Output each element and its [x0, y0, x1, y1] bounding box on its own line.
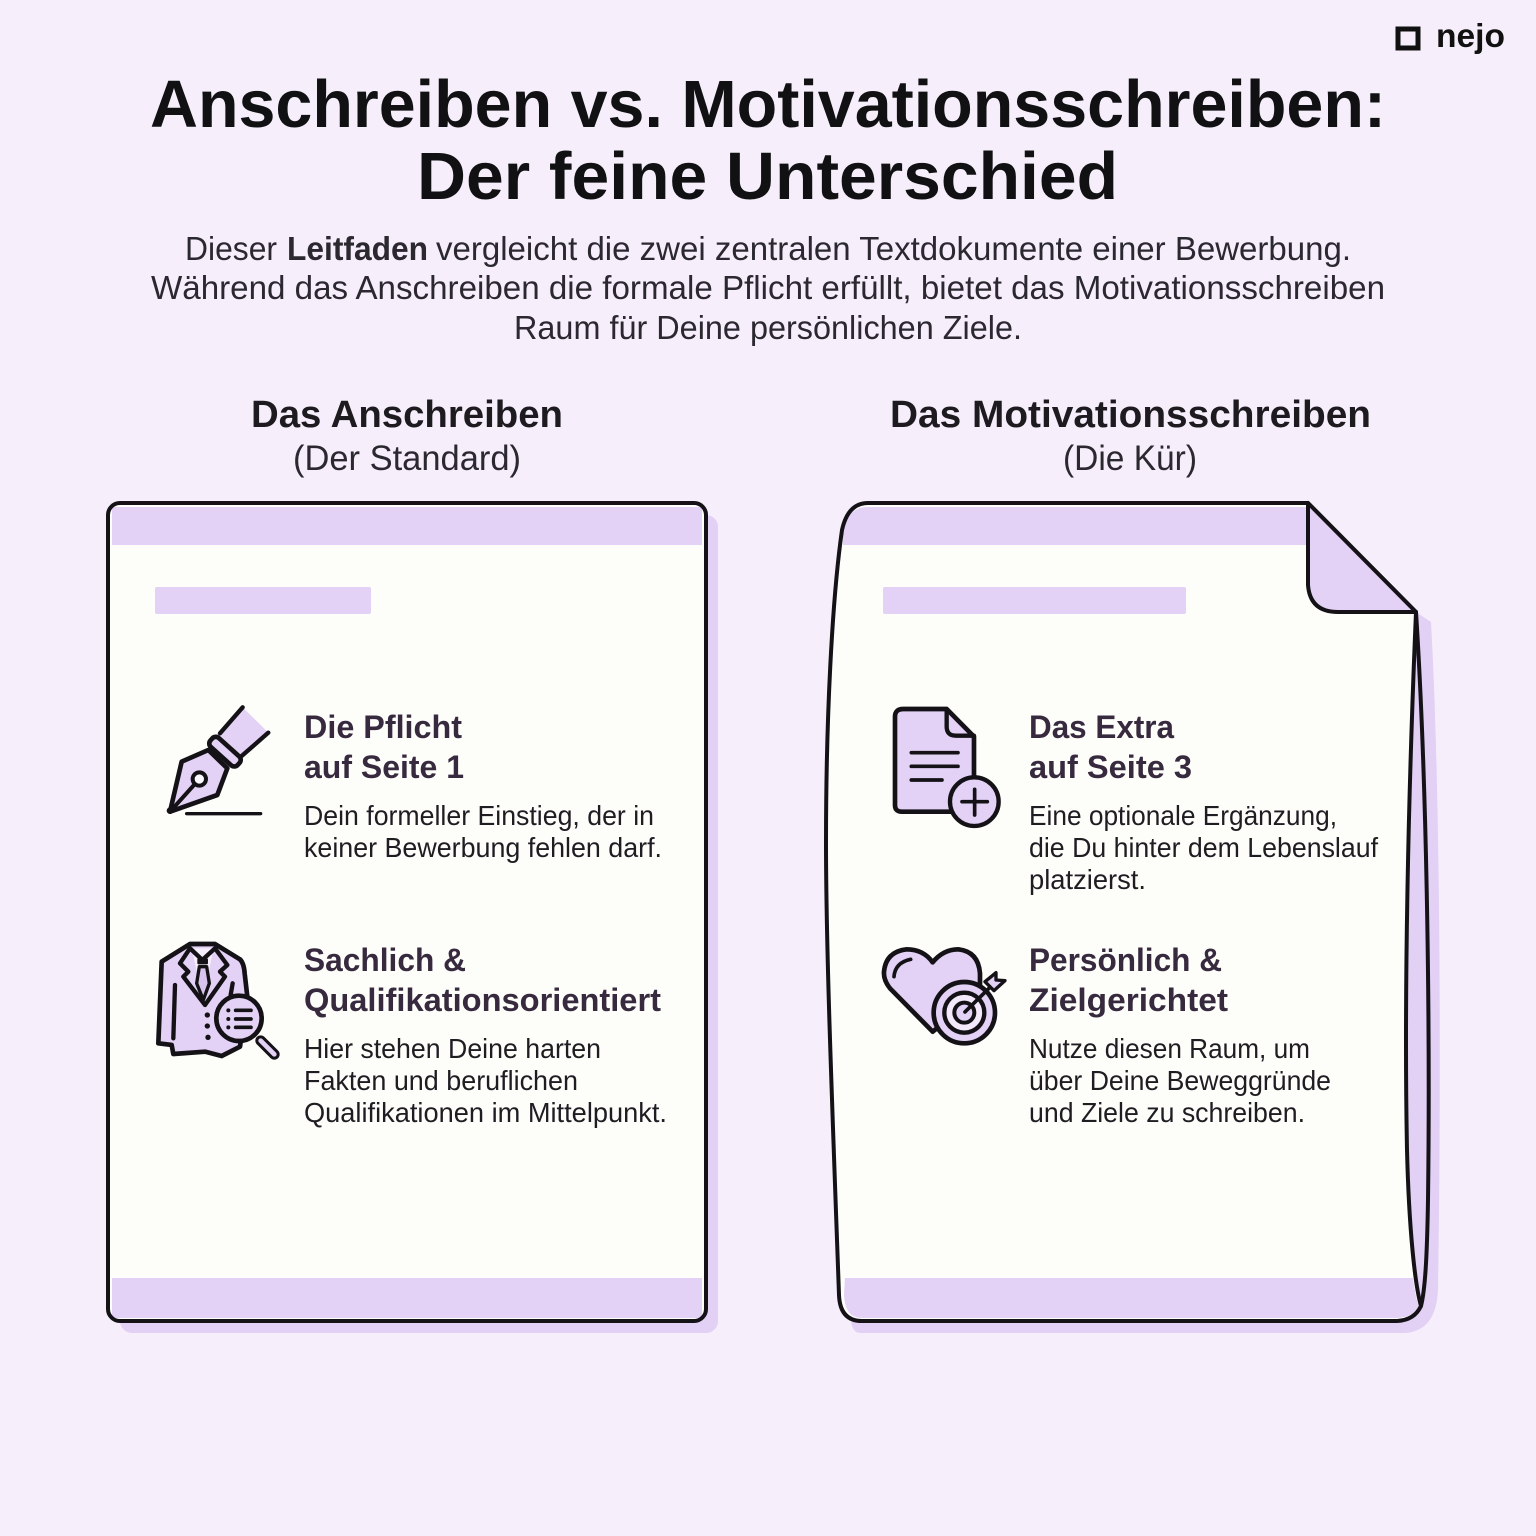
column heading: Das Anschreiben: (Der Standard) [293, 439, 521, 478]
icon: blazer with magnifier [158, 944, 274, 1056]
text: Persönlich und Zielgerichtet: Nutze diesen Raum, um [1029, 1033, 1310, 1064]
panel: Das Anschreiben [108, 503, 718, 1333]
text: Das Extra: Eine optionale Ergänzung, [1029, 800, 1337, 831]
logo: nejo: nejo [1436, 17, 1505, 54]
text: Die Pflicht: Die Pflicht [304, 709, 462, 745]
intro text: Während das Anschreiben die formale Pflicht erfüllt, bietet das Motivationsschreiben [151, 269, 1385, 306]
column heading: Das Anschreiben: Das Anschreiben [251, 394, 563, 436]
column heading: Das Motivationsschreiben [890, 394, 1371, 478]
text: Persönlich und Zielgerichtet: und Ziele zu schreiben. [1029, 1097, 1305, 1128]
icon: heart with target [884, 949, 1005, 1043]
intro text: Raum für Deine persönlichen Ziele. [514, 309, 1022, 346]
intro text [151, 230, 1385, 346]
text: Persönlich und Zielgerichtet [1029, 942, 1331, 1128]
text: Die Pflicht: keiner Bewerbung fehlen darf. [304, 832, 662, 863]
text: Sachlich und Qualifikationsorientiert [304, 942, 667, 1128]
text: Das Extra [1029, 709, 1378, 895]
text: Sachlich und Qualifikationsorientiert: Fakten und beruflichen [304, 1065, 578, 1096]
panel: Das Motivationsschreiben [826, 503, 1440, 1333]
text: Das Extra: platzierst. [1029, 864, 1146, 895]
text: Die Pflicht [304, 709, 662, 863]
text: Die Pflicht: auf Seite 1 [304, 749, 464, 785]
text: Das Extra: auf Seite 3 [1029, 749, 1192, 785]
title: Anschreiben vs. Motivationsschreiben: [150, 67, 1386, 142]
text: Sachlich und Qualifikationsorientiert: Qualifikationen im Mittelpunkt. [304, 1097, 667, 1128]
intro text: vergleicht die zwei zentralen Textdokumente einer Bewerbung. [436, 230, 1351, 267]
intro text: Dieser [185, 230, 277, 267]
column heading: Das Anschreiben [251, 394, 563, 478]
text: Sachlich und Qualifikationsorientiert: Sachlich & [304, 942, 466, 978]
text: Sachlich und Qualifikationsorientiert: Hier stehen Deine harten [304, 1033, 601, 1064]
title [150, 67, 1386, 214]
text: Das Extra: die Du hinter dem Lebenslauf [1029, 832, 1378, 863]
text: Persönlich und Zielgerichtet: Persönlich & [1029, 942, 1222, 978]
column heading: Das Motivationsschreiben: Das Motivationsschreiben [890, 394, 1371, 436]
text: Sachlich und Qualifikationsorientiert: Qualifikationsorientiert [304, 982, 661, 1018]
icon: document with plus [895, 709, 999, 826]
text: Das Extra: Das Extra [1029, 709, 1174, 745]
folded page corner [1308, 503, 1416, 612]
intro text: Leitfaden [287, 230, 428, 267]
text: Persönlich und Zielgerichtet: Zielgerichtet [1029, 982, 1228, 1018]
text: Persönlich und Zielgerichtet: über Deine Beweggründe [1029, 1065, 1331, 1096]
title: Der feine Unterschied [417, 139, 1118, 214]
column heading: Das Motivationsschreiben: (Die Kür) [1063, 439, 1197, 478]
icon: fountain pen [170, 707, 268, 814]
logo: nejo [1398, 17, 1505, 54]
text: Die Pflicht: Dein formeller Einstieg, der in [304, 800, 654, 831]
